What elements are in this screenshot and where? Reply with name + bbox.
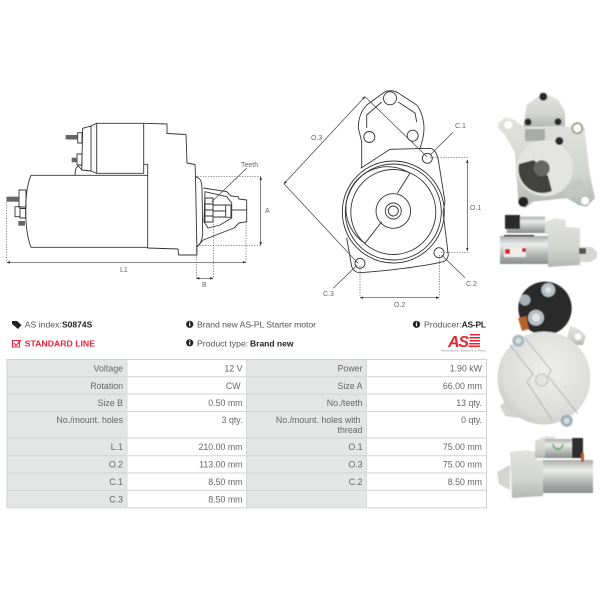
dimension O.2: O.2: [394, 302, 405, 309]
product type: [186, 338, 294, 348]
side view technical drawing: [7, 123, 270, 289]
row: size B and teeth: Size B: [98, 398, 123, 408]
teeth callout: Teeth: [241, 162, 258, 169]
row: C.3: C.3: [109, 494, 123, 504]
dimension O.3: [284, 97, 427, 263]
row: mounting holes: thread: [338, 425, 363, 435]
producer: Producer:: [424, 320, 462, 330]
dimension O.2: [360, 255, 439, 309]
photo: starter rear view: [498, 282, 590, 427]
row: size B and teeth: 0.50 mm: [208, 398, 242, 408]
dimension O.1: O.1: [470, 205, 481, 212]
starter motor side outline: [7, 123, 247, 255]
row: L.1 and O.1: L.1: [111, 442, 123, 452]
row: rotation and size A: 66.00 mm: [443, 381, 482, 391]
dimension O.1: [430, 158, 481, 253]
callout C.2: C.2: [466, 281, 477, 288]
row: C.1 and C.2: [109, 477, 482, 487]
dimension A: A: [265, 208, 270, 215]
row: rotation and size A: Rotation: [90, 381, 123, 391]
row: C.1 and C.2: C.1: [109, 477, 123, 487]
standard line badge: STANDARD LINE: [25, 338, 95, 348]
dimension A: [195, 177, 270, 245]
row: O.2 and O.3: O.2: [109, 460, 123, 470]
product type: Brand new: [250, 338, 294, 348]
row: mounting holes: 3 qty.: [222, 415, 242, 425]
row: C.1 and C.2: 8.50 mm: [208, 477, 242, 487]
AS index: AS index:: [25, 320, 62, 330]
AS-PL logo: Alternators, Starters & Parts: [441, 348, 486, 352]
callout C.3: [323, 265, 357, 298]
producer: [413, 320, 486, 330]
AS-PL logo: AS: [447, 334, 469, 351]
row: O.2 and O.3: 75.00 mm: [443, 460, 482, 470]
row: rotation and size A: [90, 381, 482, 391]
photo: starter opposite side view: [497, 436, 593, 498]
row: voltage and power: 12 V: [224, 364, 243, 374]
row: C.3: 8.50 mm: [208, 494, 242, 504]
row: L.1 and O.1: O.1: [348, 442, 363, 452]
row: O.2 and O.3: O.3: [348, 460, 363, 470]
description: Brand new AS-PL Starter motor: [197, 320, 316, 330]
row: mounting holes: 0 qty.: [461, 415, 482, 425]
product type: Product type:: [197, 338, 248, 348]
row: O.2 and O.3: [109, 460, 482, 470]
row: C.3: [109, 494, 242, 504]
part information header: [12, 320, 486, 352]
row: voltage and power: [94, 364, 483, 374]
row: voltage and power: 1.90 kW: [450, 364, 483, 374]
AS index: S0874S: [62, 320, 93, 330]
row: C.1 and C.2: 8.50 mm: [448, 477, 482, 487]
row: size B and teeth: 13 qty.: [456, 398, 482, 408]
dimension B: [196, 198, 213, 289]
producer: AS-PL: [462, 320, 486, 330]
table grid: [7, 360, 486, 508]
dimension L1: [7, 197, 246, 274]
callout C.1: C.1: [455, 123, 466, 130]
row: mounting holes: [56, 415, 482, 435]
front view technical drawing: [284, 91, 481, 309]
dimension B: B: [202, 282, 207, 289]
row: L.1 and O.1: 210.00 mm: [198, 442, 242, 452]
callout C.1: [430, 123, 466, 155]
mounting plate outline: [342, 91, 448, 273]
row: C.1 and C.2: C.2: [349, 477, 363, 487]
dimension O.3: O.3: [311, 135, 322, 142]
AS-PL logo: [441, 334, 486, 352]
photo: starter front flange: [498, 93, 595, 208]
AS index: [12, 320, 93, 330]
row: rotation and size A: Size A: [338, 381, 363, 391]
row: voltage and power: Voltage: [94, 364, 123, 374]
row: O.2 and O.3: 113.00 mm: [199, 460, 242, 470]
photo: starter side view: [500, 215, 597, 267]
row: mounting holes: No./mount. holes: [56, 415, 124, 425]
teeth callout: [212, 162, 258, 202]
row: size B and teeth: [98, 398, 482, 408]
row: voltage and power: Power: [338, 364, 363, 374]
row: size B and teeth: No./teeth: [327, 398, 363, 408]
row: mounting holes: No./mount. holes with: [276, 415, 361, 425]
dimension L1: L1: [120, 267, 128, 274]
specifications table: [7, 360, 486, 508]
callout C.3: C.3: [323, 291, 334, 298]
row: rotation and size A: CW: [226, 381, 241, 391]
row: L.1 and O.1: 75.00 mm: [443, 442, 482, 452]
callout C.2: [442, 255, 477, 288]
row: L.1 and O.1: [111, 442, 482, 452]
